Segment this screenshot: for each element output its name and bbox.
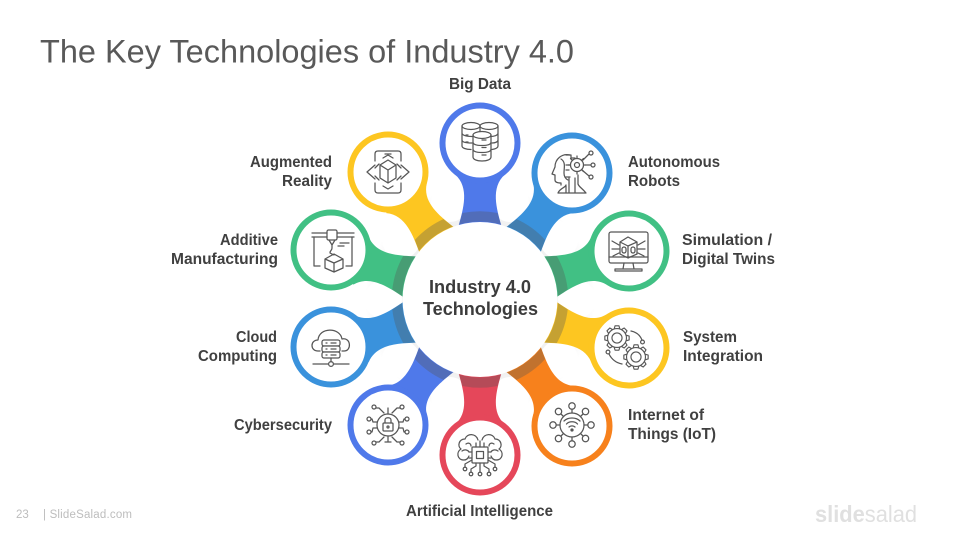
- label: Cloud Computing: Cloud: [236, 329, 277, 346]
- label: Simulation / Digital Twins: [682, 232, 775, 268]
- label: Autonomous Robots: Robots: [628, 173, 680, 190]
- label: Cloud Computing: Computing: [198, 348, 277, 365]
- icon: robot head with gear: [552, 151, 595, 193]
- petal: Cybersecurity: [372, 341, 459, 436]
- background halo ring: [364, 184, 596, 415]
- ring: Internet of Things: [534, 388, 610, 464]
- icon: gears: [605, 326, 648, 369]
- icon: monitor with digital twin cube: [609, 232, 648, 271]
- label: Internet of Things: Things (IoT): [628, 426, 716, 443]
- petal: Additive Manufacturing: [330, 229, 421, 302]
- label: Artificial Intelligence: Artificial Intelligence: [406, 503, 553, 520]
- ring: Simulation / Digital Twins: [592, 214, 666, 288]
- label: Internet of Things: Internet of: [628, 407, 705, 424]
- central circle: Industry 4.0: [429, 277, 531, 297]
- ring: Artificial Intelligence: [442, 418, 518, 492]
- central circle: [402, 222, 558, 377]
- petal: Internet of Things: [501, 341, 588, 436]
- icon: database cylinders: [462, 122, 498, 161]
- ring: Big Data: [442, 106, 518, 180]
- label: Augmented Reality: [250, 154, 332, 190]
- title: The Key Technologies of Industry 4.0: [40, 34, 574, 70]
- ring: System Integration: [592, 310, 666, 386]
- icon: wifi network: [550, 403, 594, 447]
- ring: Additive Manufacturing: [294, 212, 368, 288]
- label: Autonomous Robots: [628, 154, 720, 190]
- icon: brain and chip: [458, 435, 502, 476]
- icon: circuit padlock: [367, 405, 409, 445]
- petal: System Integration: [539, 297, 630, 370]
- petal: Autonomous Robots: [501, 163, 588, 258]
- label: Autonomous Robots: Autonomous: [628, 154, 720, 171]
- label: Additive Manufacturing: [171, 232, 278, 268]
- central circle: Technologies: [423, 299, 538, 319]
- logo: slidesalad wordmark: slidesalad: [815, 501, 917, 527]
- petal: Big Data: [455, 150, 505, 230]
- label: Big Data: Big Data: [449, 76, 511, 93]
- petal: Simulation / Digital Twins: [539, 229, 630, 302]
- label: Augmented Reality: Augmented: [250, 154, 332, 171]
- label: Augmented Reality: Reality: [282, 173, 332, 190]
- icon: cloud server: [312, 330, 349, 366]
- footer: website: | SlideSalad.com: [43, 509, 132, 521]
- label: Cybersecurity: Cybersecurity: [234, 417, 332, 434]
- label: Internet of Things: [628, 407, 716, 443]
- label: Additive Manufacturing: Additive: [220, 232, 278, 249]
- ring: Augmented Reality: [350, 134, 426, 210]
- petal: Artificial Intelligence: [455, 370, 505, 450]
- ring: Cybersecurity: [350, 388, 426, 462]
- label: Cloud Computing: [198, 329, 277, 365]
- ring: Autonomous Robots: [534, 136, 610, 210]
- icon: 3D printer: [312, 230, 354, 272]
- petal: Augmented Reality: [372, 163, 459, 258]
- label: System Integration: System: [683, 329, 737, 346]
- label: Simulation / Digital Twins: Simulation /: [682, 232, 773, 249]
- ring: Cloud Computing: [294, 310, 368, 384]
- icon: AR phone and cube: [367, 151, 409, 193]
- label: System Integration: Integration: [683, 348, 763, 365]
- petal: Cloud Computing: [330, 297, 421, 370]
- label: System Integration: [683, 329, 763, 365]
- footer: page number: 23: [16, 509, 29, 521]
- label: Additive Manufacturing: Manufacturing: [171, 251, 278, 268]
- label: Simulation / Digital Twins: Digital Twins: [682, 251, 775, 268]
